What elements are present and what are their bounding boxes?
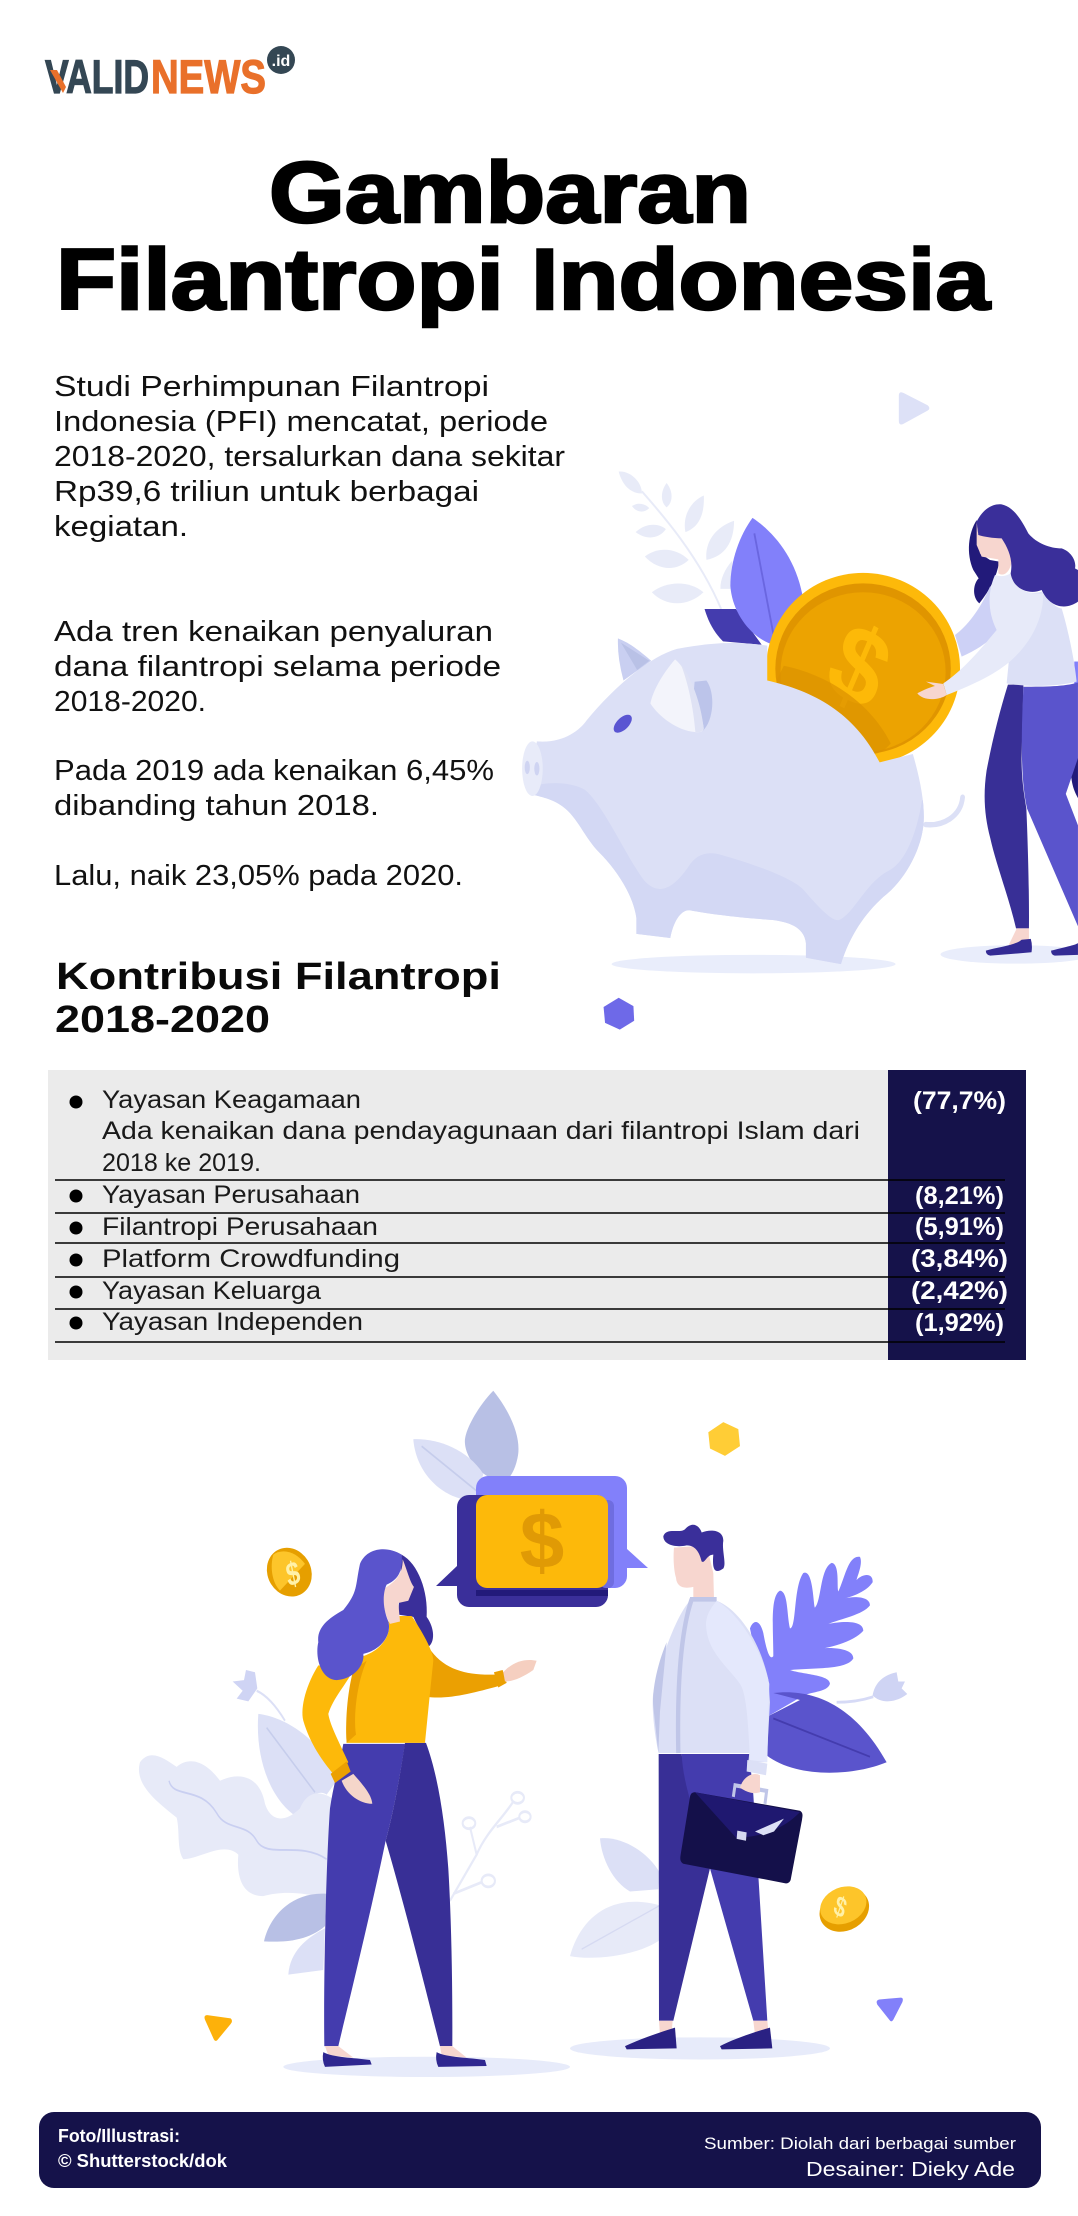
man xyxy=(625,1525,772,2049)
sweater xyxy=(346,1616,433,1743)
speech bubble with dollar card: $ xyxy=(520,1496,564,1585)
icon: pale triangle xyxy=(899,392,929,424)
credit: source and designer xyxy=(704,2134,1016,2181)
near arm xyxy=(943,573,1043,695)
row: Yayasan Independen: (1,92%) xyxy=(915,1309,1004,1337)
hair xyxy=(977,504,1078,606)
credit: photo xyxy=(58,2126,228,2171)
sweater xyxy=(653,1601,770,1762)
face xyxy=(674,1545,714,1598)
leaves behind pig xyxy=(705,518,802,645)
shadow xyxy=(283,2057,570,2077)
sweater xyxy=(1007,585,1077,686)
text block: trend xyxy=(54,616,501,718)
icon: coin xyxy=(817,1882,872,1937)
hand xyxy=(917,682,947,699)
pale leaves xyxy=(570,1838,660,1958)
credit: source and designer: Desainer: Dieky Ade xyxy=(806,2159,1015,2181)
shadows xyxy=(612,955,896,973)
coin: $ xyxy=(812,598,907,734)
heading: Kontribusi: Kontribusi Filantropi xyxy=(56,956,501,998)
near arm xyxy=(302,1665,353,1774)
row: Yayasan Keagamaan: Ada kenaikan dana pendayagunaan dari filantropi Islam dari xyxy=(102,1117,860,1145)
text block: 2020: Lalu, naik 23,05% pada 2020. xyxy=(54,860,463,892)
icon: hexagon xyxy=(604,998,634,1030)
text block: trend: 2018-2020. xyxy=(54,686,206,718)
row: Filantropi Perusahaan: (5,91%) xyxy=(915,1213,1004,1241)
decor: cloud leaf xyxy=(139,1670,337,1975)
icon: purple triangle xyxy=(877,1998,903,2021)
icon: coin xyxy=(264,1542,315,1602)
row: Yayasan Perusahaan: (8,21%) xyxy=(915,1182,1004,1210)
coin xyxy=(759,573,960,770)
row: Yayasan Perusahaan: Yayasan Perusahaan xyxy=(102,1181,360,1209)
illustration: woman decor and figure xyxy=(139,1391,570,2077)
illustration: piggy bank xyxy=(500,392,1078,1030)
logo: Validnews.id: NEWS xyxy=(151,50,266,103)
logo: Validnews.id xyxy=(45,46,295,103)
pale sprig xyxy=(619,472,734,609)
row: Yayasan Keagamaan: 2018 ke 2019. xyxy=(102,1149,261,1177)
back hair xyxy=(969,520,999,603)
icon: coin: $ xyxy=(830,1889,850,1925)
text block: trend: Ada tren kenaikan penyaluran xyxy=(54,616,493,648)
ankles xyxy=(659,2021,673,2035)
text block: 2019: dibanding tahun 2018. xyxy=(54,790,379,822)
pants xyxy=(324,1744,405,2046)
row: Yayasan Keagamaan: (77,7%) xyxy=(913,1087,1006,1115)
text block: intro: Indonesia (PFI) mencatat, periode xyxy=(54,406,548,438)
title: Gambaran xyxy=(269,145,751,241)
pants xyxy=(659,1754,710,2021)
far arm xyxy=(955,587,1000,657)
credit: photo: © Shutterstock/dok xyxy=(58,2151,228,2171)
text block: 2019: Pada 2019 ada kenaikan 6,45% xyxy=(54,755,494,787)
title xyxy=(56,145,991,328)
text block: intro xyxy=(54,371,566,543)
row: Filantropi Perusahaan: Filantropi Perusahaan xyxy=(102,1213,378,1241)
illustration: man and decor xyxy=(570,1422,907,2059)
icon: yellow triangle xyxy=(205,2015,232,2041)
credit: source and designer: Sumber: Diolah dari berbagai sumber xyxy=(704,2134,1016,2153)
heading: Kontribusi xyxy=(55,956,501,1041)
panel: contribution table xyxy=(48,1070,1026,1360)
briefcase xyxy=(680,1774,803,1883)
face xyxy=(977,522,1012,575)
woman: legs xyxy=(985,662,1078,956)
row: Platform Crowdfunding: (3,84%) xyxy=(911,1245,1008,1273)
row: Yayasan Keagamaan: Yayasan Keagamaan xyxy=(102,1086,361,1114)
pig body xyxy=(534,643,965,964)
text block: intro: kegiatan. xyxy=(54,511,188,543)
credit: photo: Foto/Illustrasi: xyxy=(58,2126,180,2146)
icon: yellow hexagon xyxy=(708,1422,740,1456)
decor: sprig xyxy=(450,1792,531,1901)
logo: Validnews.id: .id xyxy=(272,53,290,70)
row: Yayasan Keluarga xyxy=(70,1277,1008,1305)
text block: trend: dana filantropi selama periode xyxy=(54,651,501,683)
row: Filantropi Perusahaan xyxy=(70,1213,1004,1241)
leaves top xyxy=(413,1391,518,1500)
pig details xyxy=(522,638,712,796)
row: Yayasan Keagamaan xyxy=(70,1086,1006,1177)
face xyxy=(383,1559,414,1624)
row: Platform Crowdfunding: Platform Crowdfunding xyxy=(102,1245,400,1273)
row: Platform Crowdfunding xyxy=(70,1245,1008,1273)
text block: intro: Rp39,6 triliun untuk berbagai xyxy=(54,476,479,508)
logo: Validnews.id: VALID xyxy=(45,50,149,103)
row: Yayasan Keluarga: Yayasan Keluarga xyxy=(102,1277,321,1305)
row: Yayasan Independen: Yayasan Independen xyxy=(102,1308,363,1336)
text block: intro: 2018-2020, tersalurkan dana sekitar xyxy=(54,441,566,473)
back hair xyxy=(398,1555,433,1647)
speech bubble with dollar card xyxy=(436,1476,648,1607)
hair xyxy=(663,1525,724,1571)
text block: intro: Studi Perhimpunan Filantropi xyxy=(54,371,489,403)
row: Yayasan Independen xyxy=(70,1308,1004,1337)
row: Yayasan Keluarga: (2,42%) xyxy=(911,1277,1008,1305)
woman xyxy=(302,1549,537,2067)
row: Yayasan Perusahaan xyxy=(70,1181,1004,1210)
hair xyxy=(317,1549,402,1680)
woman upper body xyxy=(917,504,1078,699)
shadow xyxy=(570,2037,830,2059)
far arm xyxy=(427,1647,498,1698)
icon: coin: $ xyxy=(283,1555,303,1595)
heading: Kontribusi: 2018-2020 xyxy=(55,999,270,1041)
plant: monstera xyxy=(750,1557,907,1773)
shoes xyxy=(625,2028,677,2049)
text block: 2019 xyxy=(54,755,494,822)
shoes xyxy=(325,2046,353,2058)
footer bar xyxy=(39,2112,1041,2188)
title: Filantropi Indonesia xyxy=(56,232,991,328)
